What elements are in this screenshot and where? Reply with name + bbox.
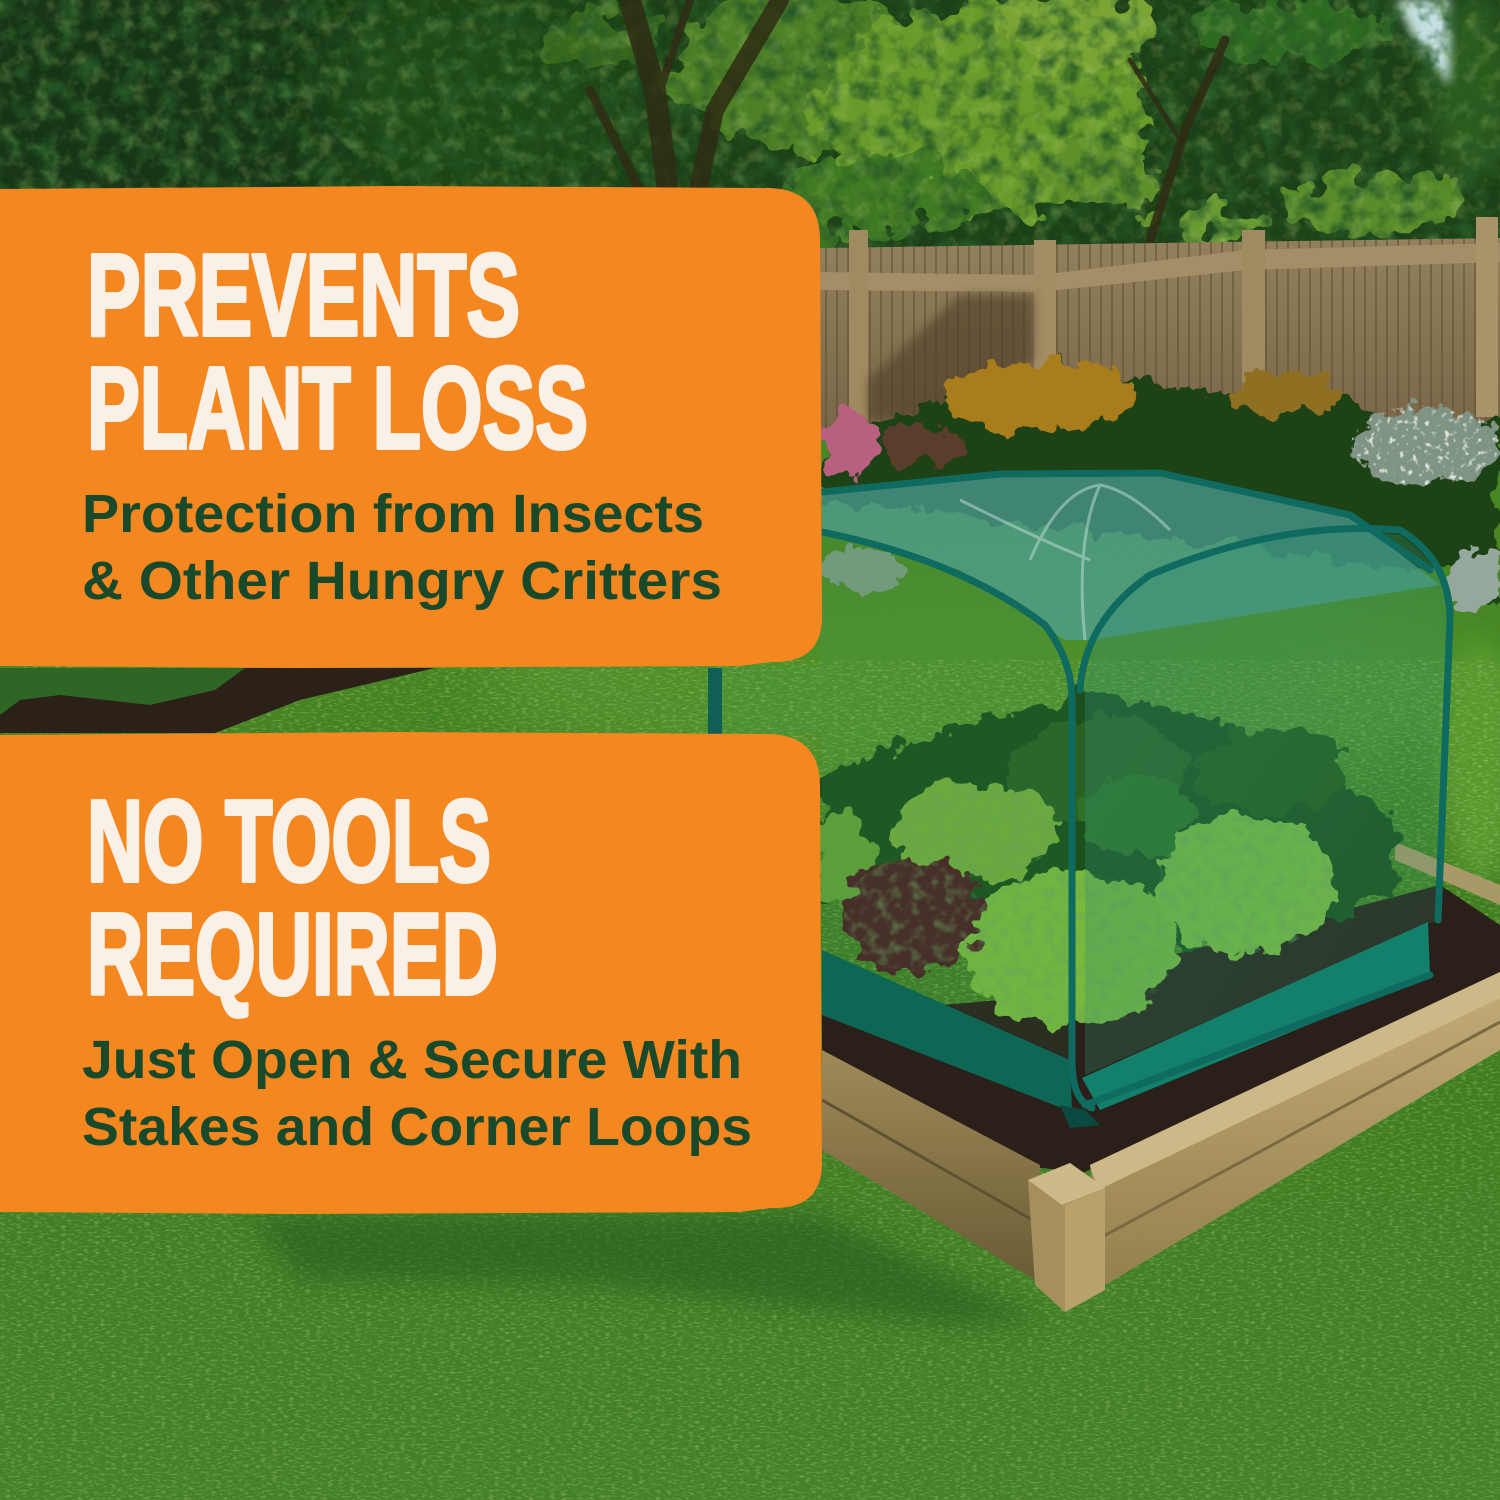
left rail [822,1050,1040,1280]
netting: left side [722,530,1072,1060]
hem: left [822,950,1072,1112]
plants [815,690,1400,1030]
subheading: & Other Hungry Critters [82,551,722,611]
right rail [1090,972,1500,1285]
far soil bed [0,668,435,733]
pop-up garden cover [708,473,1450,1128]
corner post [1028,1163,1105,1312]
panel: prevents plant loss [0,186,822,668]
fence [820,217,1500,430]
hem: right [1082,922,1430,1110]
raised wooden bed [822,842,1500,1312]
panel background [0,186,822,668]
shadow on grass [250,1215,1040,1325]
subheading: Protection from Insects [82,484,704,544]
panel background [0,732,822,1214]
heading: NO TOOLS [87,776,491,906]
heading: PREVENTS [87,230,520,360]
soil [822,885,1500,1172]
back right rail [1395,842,1500,905]
heading: REQUIRED [87,889,498,1019]
heading [87,230,588,473]
trees [0,0,1500,255]
netting: right side [1085,532,1450,1075]
subheading: Just Open & Secure With [82,1030,742,1090]
heading [87,776,498,1019]
subheading [82,1030,752,1157]
lawn [0,420,1500,1500]
flower bed [822,360,1500,610]
netting: top [822,473,1440,640]
frame wires [822,473,1450,1108]
heading: PLANT LOSS [87,343,588,473]
subheading [82,484,722,611]
left pole [708,668,722,734]
subheading: Stakes and Corner Loops [82,1097,752,1157]
panel: no tools required [0,732,822,1214]
